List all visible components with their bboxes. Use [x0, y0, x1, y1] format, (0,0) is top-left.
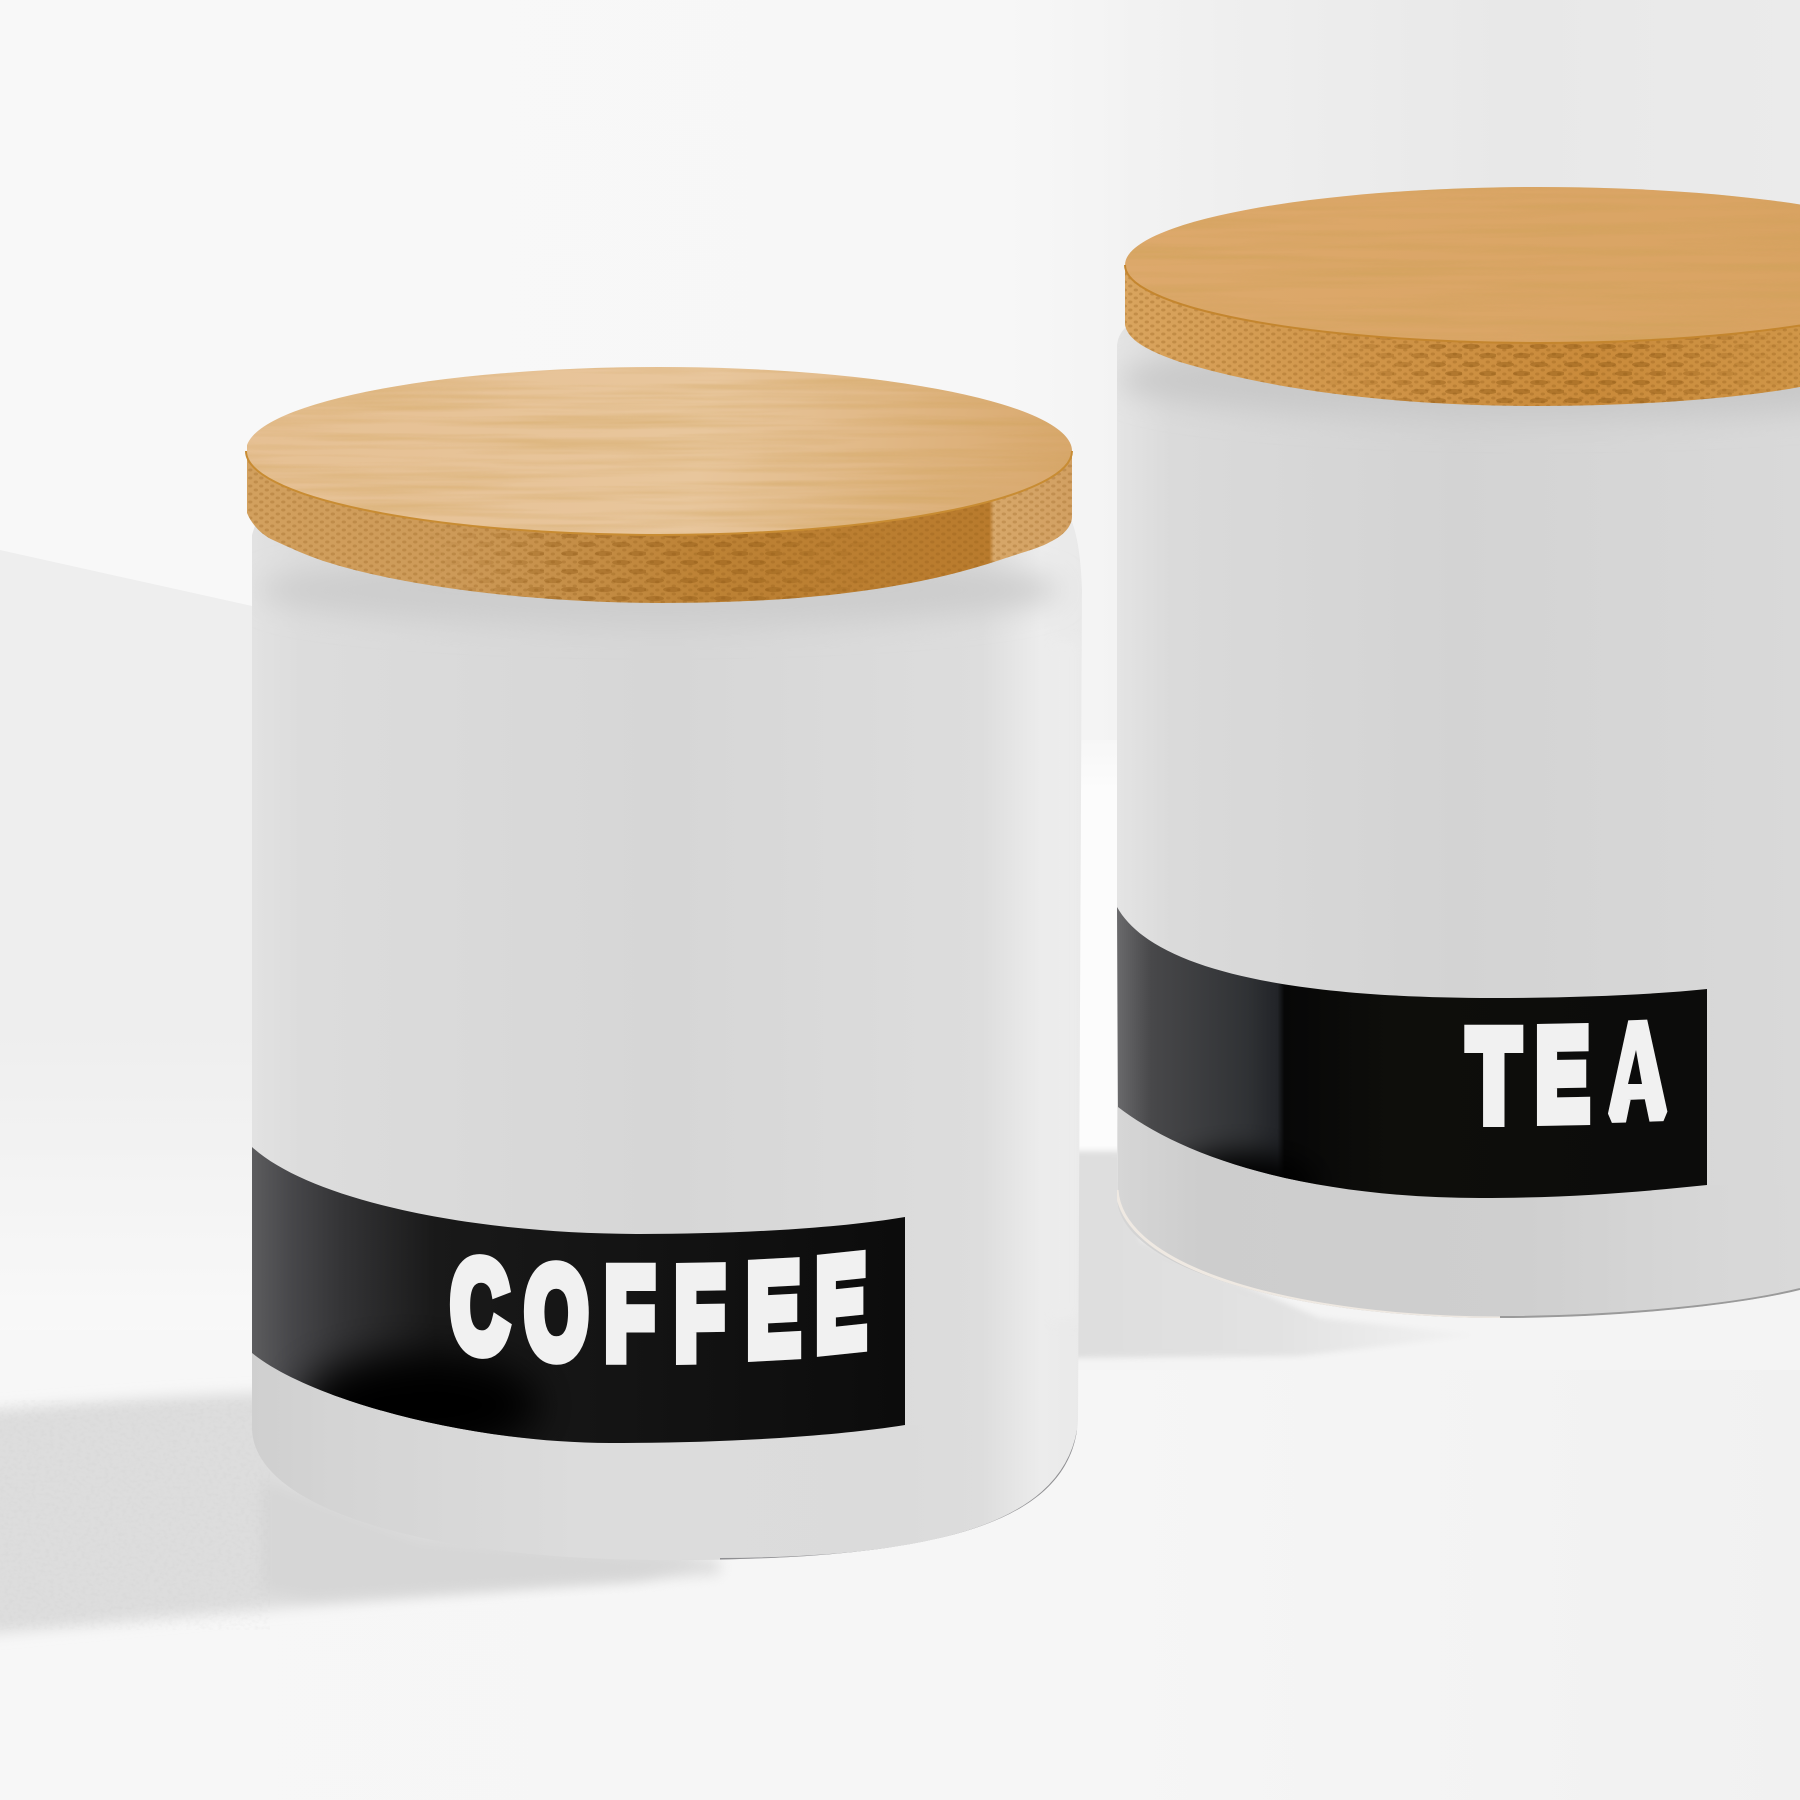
coffee canister body	[252, 510, 1082, 1570]
coffee label text: C	[451, 1234, 508, 1380]
coffee label text: F	[675, 1241, 724, 1386]
tea canister	[1117, 187, 1800, 1330]
tea label text: E	[1536, 1003, 1589, 1147]
coffee lid top	[247, 365, 1072, 536]
coffee canister	[246, 365, 1082, 1570]
coffee label band	[252, 1140, 905, 1457]
coffee label text	[451, 1230, 866, 1386]
shadow: coffee jar cast shadow on surface	[0, 1392, 720, 1636]
tea label text: A	[1610, 999, 1665, 1144]
coffee lid side	[247, 449, 1072, 609]
coffee label text: E	[747, 1237, 800, 1383]
tea label band	[1117, 900, 1717, 1217]
tea label text	[1468, 999, 1665, 1147]
tea lid side	[1125, 260, 1800, 410]
tea canister body	[1117, 328, 1800, 1330]
tea label text: T	[1468, 1004, 1520, 1147]
tea lid top	[1125, 187, 1800, 343]
coffee label text: E	[816, 1230, 866, 1378]
coffee label text: O	[525, 1240, 588, 1385]
shadow: tea jar cast shadow on surface	[1060, 1151, 1480, 1358]
coffee label text: F	[605, 1242, 654, 1386]
